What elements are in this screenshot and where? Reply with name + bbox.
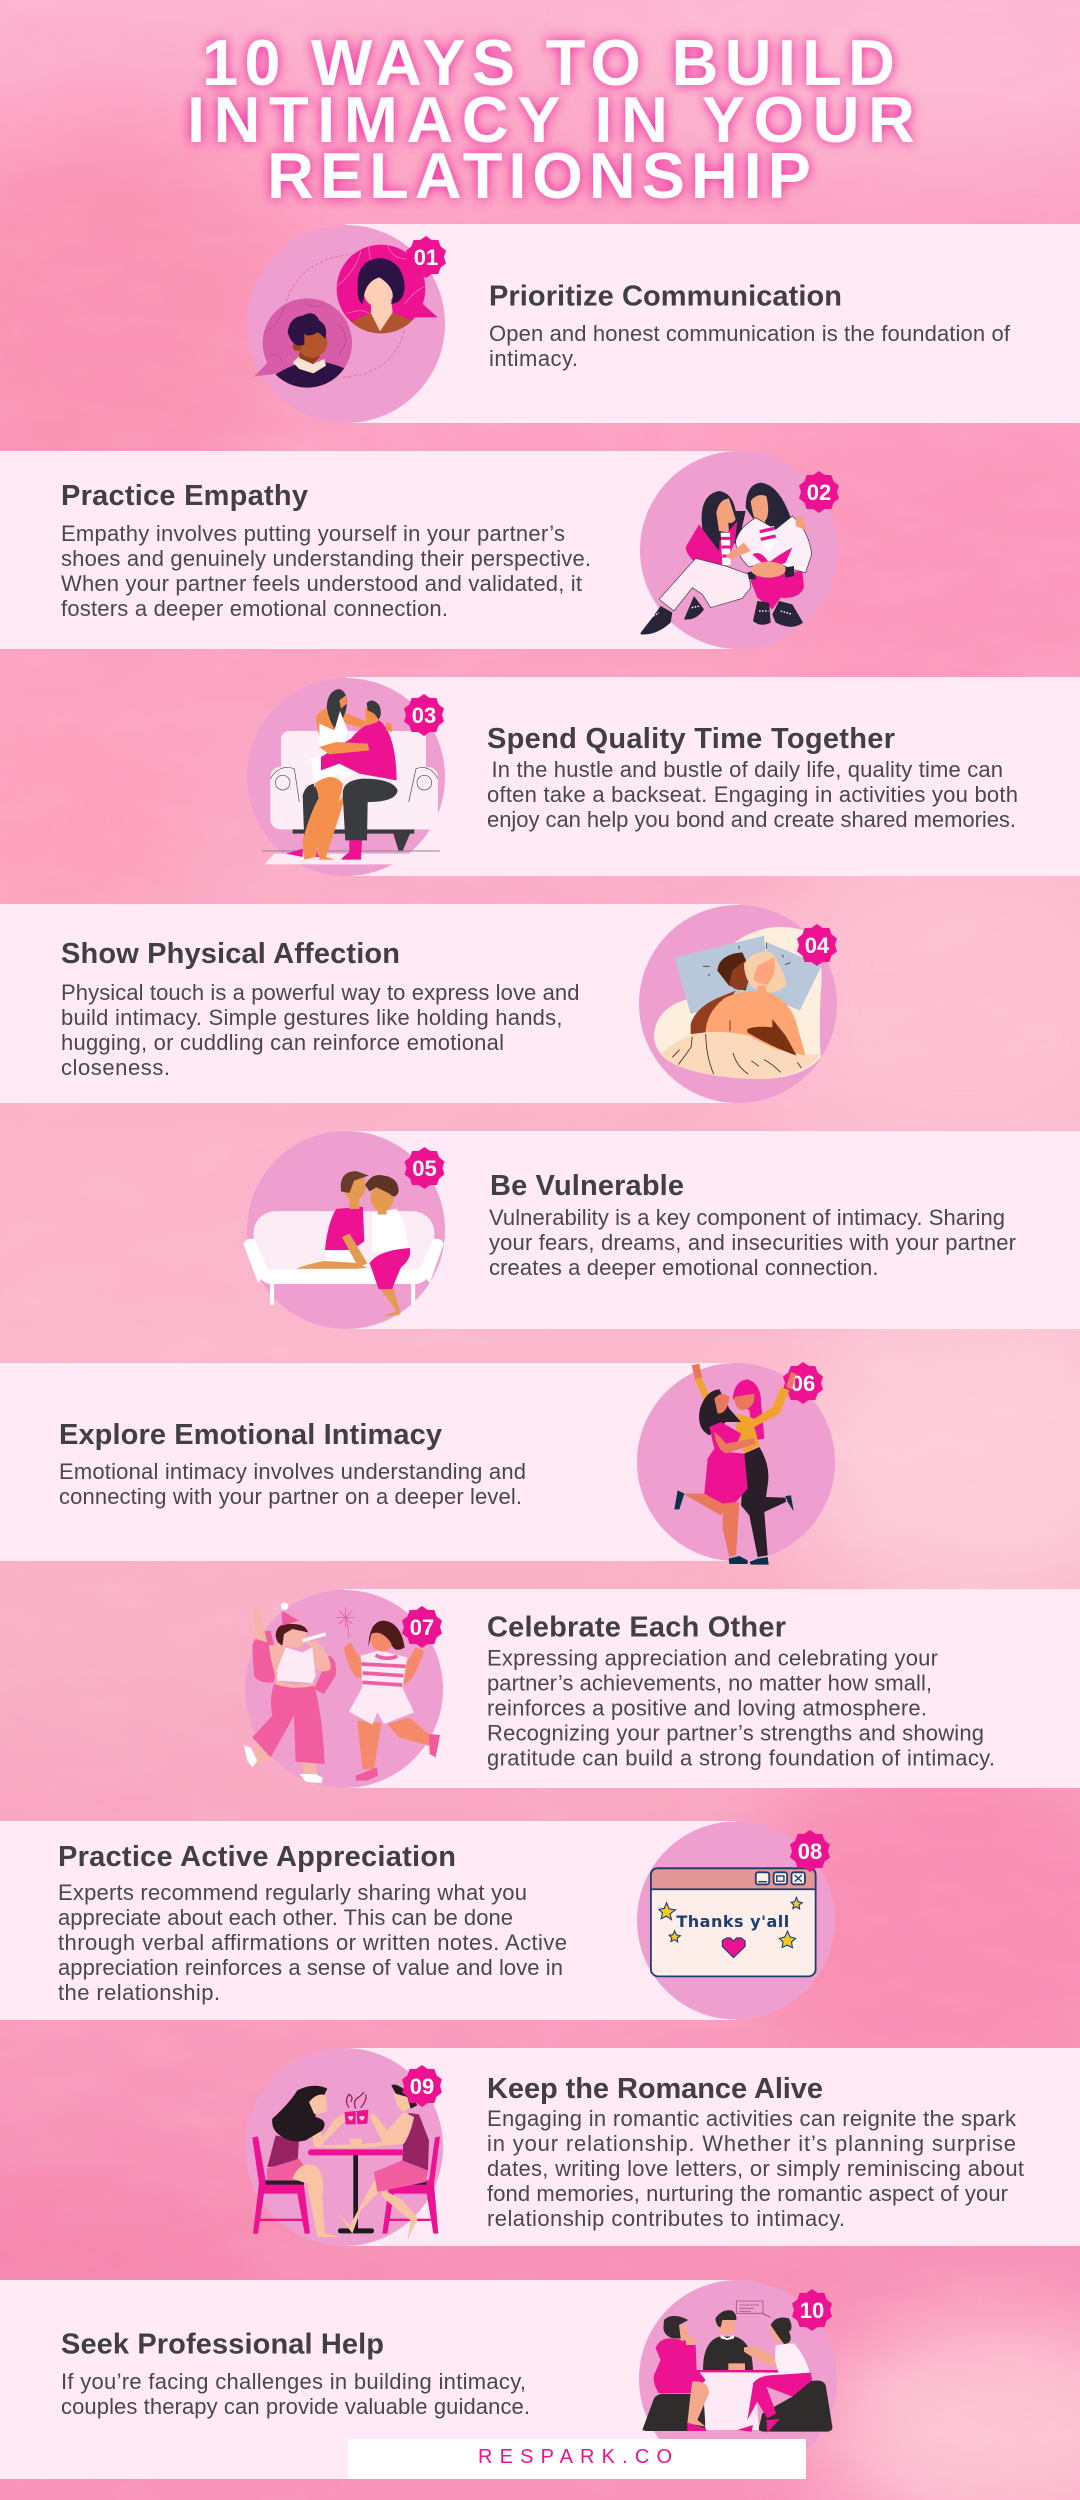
badge 08 (790, 1830, 830, 1872)
heading 09: Keep the Romance Alive (487, 2073, 823, 2105)
panel: 01 prioritize communication (247, 224, 1080, 423)
heading 05: Be Vulnerable (490, 1170, 684, 1202)
text 09: in your relationship. Whether it’s planning surprise (487, 2131, 1016, 2156)
text 01: Open and honest communication is the foundation of (489, 321, 1011, 346)
text 05: Vulnerability is a key component of intimacy. Sharing (489, 1205, 1005, 1230)
text 09: dates, writing love letters, or simply reminiscing about (487, 2156, 1024, 2181)
text 08: appreciate about each other. This can be done (58, 1905, 513, 1930)
band 10 (0, 2280, 738, 2479)
panel: 06 explore emotional intimacy (0, 1362, 835, 1565)
title: 10 WAYS TO BUILD (202, 26, 895, 99)
panel: 03 spend quality time together (247, 677, 1080, 876)
band 09 (344, 2048, 1080, 2246)
icon: couple at a cafe table (252, 2085, 440, 2240)
text 04: Physical touch is a powerful way to express love and (61, 980, 580, 1005)
text 06: connecting with your partner on a deeper level. (59, 1484, 522, 1509)
badge 02: 02 (807, 480, 831, 505)
text 03: enjoy can help you bond and create shared memories. (487, 807, 1016, 832)
panel: 08 practice active appreciation (0, 1821, 835, 2020)
circle 06 (637, 1363, 835, 1561)
heading 02: Practice Empathy (61, 480, 308, 512)
text 02: Empathy involves putting yourself in your partner’s (61, 521, 565, 546)
badge 05 (405, 1147, 444, 1189)
badge 03 (404, 694, 444, 736)
badge 06: 06 (791, 1371, 815, 1396)
band 02 (0, 451, 739, 649)
icon: couple in bed (654, 927, 822, 1079)
text 08: appreciation reinforces a sense of value and love in (58, 1955, 563, 1980)
text 09: relationship contributes to intimacy. (487, 2206, 845, 2231)
badge 01: 01 (414, 245, 438, 270)
text 06: Emotional intimacy involves understanding and (59, 1459, 526, 1484)
text 02 (61, 521, 591, 621)
badge 02 (799, 471, 839, 513)
panel: 05 be vulnerable (243, 1131, 1080, 1329)
text 03: often take a backseat. Engaging in activities you both (487, 782, 1018, 807)
text 07 (487, 1646, 995, 1770)
text 02: shoes and genuinely understanding their perspective. (61, 546, 591, 571)
icon: two women sitting together (641, 483, 812, 635)
title (187, 26, 915, 212)
text 08: Experts recommend regularly sharing what you (58, 1880, 527, 1905)
heading 04: Show Physical Affection (61, 938, 400, 970)
footer: respark.co: RESPARK.CO (478, 2446, 672, 2468)
icon: couple on armchair (262, 689, 440, 864)
icon: two people in speech bubbles (254, 245, 438, 391)
band 06 (0, 1363, 736, 1561)
text 10: couples therapy can provide valuable guidance. (61, 2394, 530, 2419)
panel: 10 seek professional help (0, 2280, 837, 2479)
icon: two women celebrating (244, 1603, 440, 1783)
circle 07 (245, 1590, 443, 1788)
text 05 (489, 1205, 1016, 1280)
text 07: Expressing appreciation and celebrating your (487, 1646, 938, 1670)
text 01: intimacy. (489, 346, 578, 371)
text 06 (59, 1459, 526, 1509)
circle 05 (247, 1131, 445, 1329)
badge 08: 08 (798, 1839, 822, 1864)
icon: couple with therapist (642, 2301, 832, 2433)
text 03: In the hustle and bustle of daily life, quality time can (492, 757, 1003, 782)
text 04: hugging, or cuddling can reinforce emotional (61, 1030, 504, 1055)
heading 01: Prioritize Communication (489, 280, 842, 312)
band 01 (346, 224, 1080, 423)
title: INTIMACY IN YOUR (187, 83, 915, 156)
text 04 (61, 980, 580, 1080)
heading 08: Practice Active Appreciation (58, 1841, 456, 1873)
badge 09: 09 (410, 2074, 434, 2099)
text 04: closeness. (61, 1055, 170, 1080)
heading 07: Celebrate Each Other (487, 1612, 786, 1644)
icon: thanks window (651, 1868, 816, 1976)
band 03 (346, 677, 1080, 876)
circle 04 (639, 905, 837, 1103)
badge 10: 10 (800, 2298, 824, 2323)
badge 06 (783, 1362, 823, 1404)
circle 02 (640, 451, 838, 649)
text 04: build intimacy. Simple gestures like holding hands, (61, 1005, 562, 1030)
panel: 04 show physical affection (0, 904, 837, 1103)
badge 04: 04 (805, 933, 830, 958)
badge 05: 05 (412, 1156, 437, 1181)
band 04 (0, 904, 739, 1103)
band 05 (346, 1131, 1080, 1329)
circle 09 (245, 2048, 443, 2246)
text 10 (61, 2369, 530, 2419)
heading 06: Explore Emotional Intimacy (59, 1419, 442, 1451)
badge 07 (402, 1606, 442, 1648)
heading 10: Seek Professional Help (61, 2328, 384, 2360)
badge 09 (402, 2065, 442, 2107)
badge 10 (792, 2289, 832, 2331)
title: RELATIONSHIP (267, 139, 811, 212)
badge 03: 03 (412, 703, 436, 728)
panel: 09 keep the romance alive (245, 2048, 1080, 2246)
text 08: through verbal affirmations or written notes. Active (58, 1930, 567, 1955)
text 03 (487, 757, 1018, 832)
text 08 (58, 1880, 567, 2005)
band 07 (344, 1589, 1080, 1788)
text 09 (487, 2106, 1024, 2231)
text 07: gratitude can build a strong foundation of intimacy. (487, 1746, 995, 1770)
text 07: partner’s achievements, no matter how small, (487, 1670, 932, 1696)
text 08: the relationship. (58, 1980, 220, 2005)
badge 01 (406, 236, 446, 278)
text 01 (489, 321, 1011, 371)
band 08 (0, 1821, 736, 2020)
panel: 02 practice empathy (0, 451, 839, 649)
text 05: your fears, dreams, and insecurities with your partner (489, 1230, 1016, 1255)
circle 10 (639, 2280, 837, 2478)
text 09: fond memories, nurturing the romantic aspect of your (487, 2181, 1008, 2206)
heading 03: Spend Quality Time Together (487, 723, 895, 755)
text 02: When your partner feels understood and validated, it (61, 571, 582, 596)
circle 08 (637, 1822, 835, 2020)
badge 07: 07 (410, 1615, 434, 1640)
icon: thanks window: Thanks y'all (676, 1912, 789, 1931)
icon: two women hugging (674, 1364, 796, 1565)
icon: couple on sofa (243, 1171, 444, 1316)
panel: 07 celebrate each other (244, 1589, 1080, 1788)
circle 03 (247, 678, 445, 876)
text 10: If you’re facing challenges in building intimacy, (61, 2369, 526, 2394)
text 09: Engaging in romantic activities can reignite the spark (487, 2106, 1017, 2131)
text 02: fosters a deeper emotional connection. (61, 596, 448, 621)
text 07: reinforces a positive and loving atmosphere. (487, 1696, 927, 1720)
footer: respark.co (348, 2439, 806, 2479)
badge 04 (797, 924, 837, 966)
text 07: Recognizing your partner’s strengths and showing (487, 1720, 984, 1746)
text 05: creates a deeper emotional connection. (489, 1255, 878, 1280)
circle 01 (247, 225, 445, 423)
